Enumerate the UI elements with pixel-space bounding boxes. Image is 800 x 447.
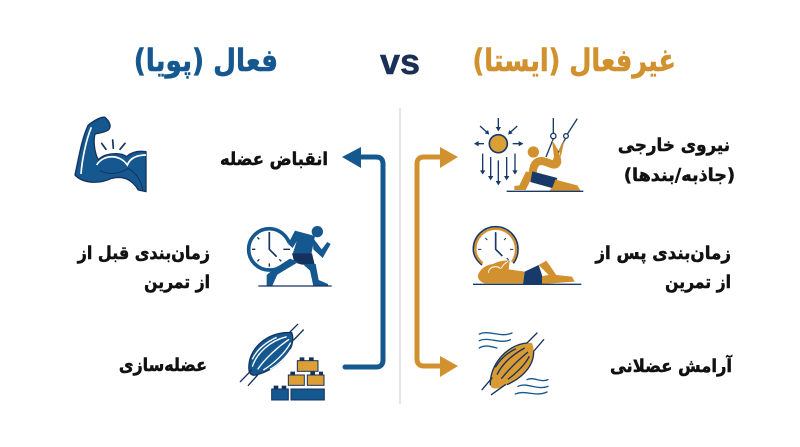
icon: external force figure	[474, 118, 583, 191]
label: muscle relaxation: آرامش عضلانی	[610, 354, 733, 377]
label: post-workout timing: از تمرین	[665, 271, 731, 293]
label: post-workout timing	[594, 243, 731, 293]
icon: muscle and building blocks	[240, 324, 324, 400]
label: pre-workout timing: زمان‌بندی قبل از	[77, 243, 210, 264]
label: pre-workout timing	[77, 243, 210, 293]
label: muscle building: عضله‌سازی	[119, 355, 207, 376]
heading: passive: غیرفعال (ایستا)	[473, 43, 676, 79]
heading: vs: vs	[380, 41, 420, 82]
icon: relaxed muscle and waves	[479, 333, 548, 395]
arrow: orange, external force to relaxation	[417, 147, 458, 377]
label: external force: (جاذبه/بندها)	[624, 165, 735, 186]
label: external force: نیروی خارجی	[618, 135, 730, 156]
arrow: blue, muscle building to contraction	[342, 147, 383, 367]
heading: active: فعال (پویا)	[134, 42, 278, 79]
icon: flexed arm	[75, 117, 146, 192]
label: pre-workout timing: از تمرین	[144, 271, 210, 293]
label: external force	[618, 135, 735, 186]
icon: clock and runner	[249, 226, 332, 286]
icon: clock and resting figure	[473, 227, 581, 284]
label: post-workout timing: زمان‌بندی پس از	[594, 243, 731, 264]
label: muscle contraction: انقباض عضله	[220, 149, 328, 170]
